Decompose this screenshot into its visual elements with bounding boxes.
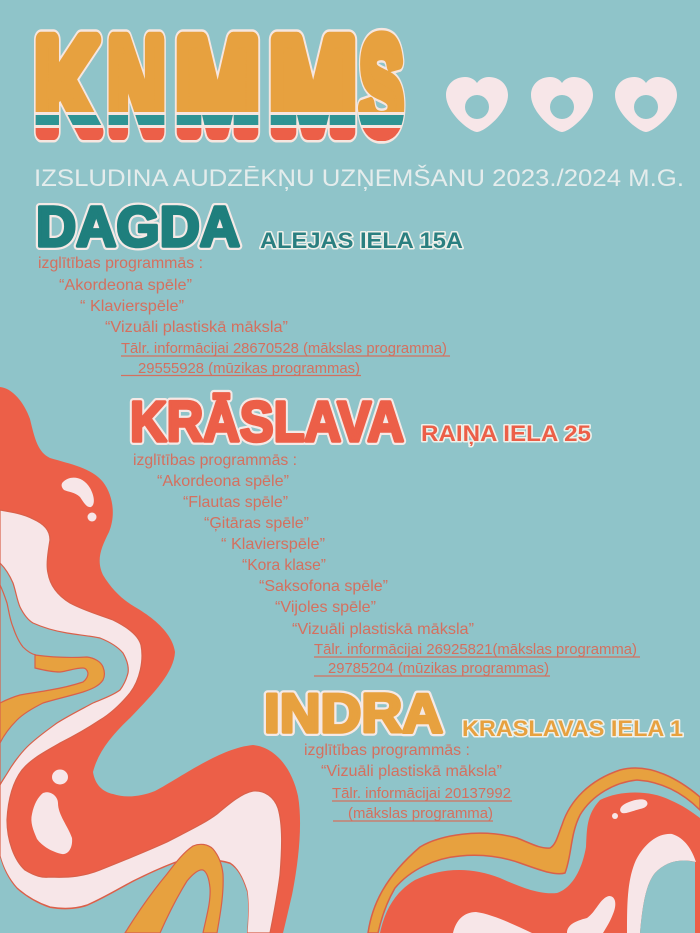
program list: Krāslava: “ Klavierspēle” <box>221 536 325 553</box>
logo: KNMMS: M <box>176 12 259 161</box>
logo: KNMMS: K <box>35 12 99 161</box>
program list: Krāslava: “Kora klase” <box>242 557 326 574</box>
heading: Krāslava: KRĀSLAVA <box>130 390 404 454</box>
program list: Krāslava: “Vizuāli plastiskā māksla” <box>292 621 474 638</box>
poster: S <box>360 12 403 161</box>
program list: Dagda: izglītības programmās : <box>38 255 203 272</box>
address: Indra: KRASLAVAS IELA 1 <box>462 716 683 741</box>
highlight: upper dot <box>88 512 96 522</box>
program list: Krāslava: “Saksofona spēle” <box>259 578 388 595</box>
highlight: bottom-right dot <box>612 813 618 819</box>
logo: KNMMS: M <box>176 12 259 161</box>
program list: Krāslava <box>133 452 474 638</box>
logo: KNMMS: M <box>176 12 259 161</box>
logo: KNMMS: N <box>108 12 165 161</box>
program list: Dagda <box>38 255 288 336</box>
contacts: Krāslava: 29785204 (mūzikas programmas) <box>328 660 549 677</box>
program list: Krāslava: “Akordeona spēle” <box>157 473 289 490</box>
bottom-right retro wave decoration <box>368 768 700 933</box>
program list: Indra: “Vizuāli plastiskā māksla” <box>321 763 502 780</box>
contacts: Dagda: Tālr. informācijai 28670528 (mākslas programma) <box>121 340 447 357</box>
program list: Krāslava: “Flautas spēle” <box>183 494 288 511</box>
contacts: Krāslava: Tālr. informācijai 26925821(mākslas programma) <box>314 641 637 658</box>
highlight: bottom-right blob 1 <box>453 912 532 933</box>
section: Krāslava <box>130 390 640 677</box>
contacts: Dagda: 29555928 (mūzikas programmas) <box>138 360 360 377</box>
left retro wave decoration <box>0 387 300 933</box>
section: Dagda <box>36 195 463 377</box>
contacts: Krāslava <box>314 641 640 677</box>
program list: Krāslava: izglītības programmās : <box>133 452 297 469</box>
logo: KNMMS: M <box>270 12 356 161</box>
heading: Dagda: DAGDA <box>36 195 240 259</box>
contacts: Indra: (mākslas programma) <box>348 805 493 822</box>
heading: Dagda: DAGDA <box>36 195 240 259</box>
program list: Dagda: “Vizuāli plastiskā māksla” <box>105 319 288 336</box>
logo: KNMMS: M <box>176 12 259 161</box>
orange arch bottom <box>125 844 223 933</box>
logo: KNMMS: K <box>35 12 99 161</box>
highlight: bottom-right blob 2 <box>567 896 615 933</box>
icon: heart 1 <box>446 77 508 132</box>
logo: KNMMS: K <box>35 12 99 161</box>
orange ribbon left <box>0 655 104 743</box>
highlight: upper blob <box>62 478 94 507</box>
section: Indra <box>264 682 683 822</box>
heading: Indra: INDRA <box>264 682 443 744</box>
program list: Krāslava: “Ģitāras spēle” <box>204 515 309 532</box>
logo: KNMMS: N <box>108 12 165 161</box>
poster: S <box>360 12 403 161</box>
logo: KNMMS: K <box>35 12 99 161</box>
program list: Krāslava: “Vijoles spēle” <box>275 599 376 616</box>
program list: Dagda: “Akordeona spēle” <box>59 277 192 294</box>
icons: three hearts <box>446 77 677 132</box>
contacts: Indra <box>332 785 512 822</box>
contacts: Indra: Tālr. informācijai 20137992 <box>332 785 511 802</box>
contacts: Dagda <box>121 340 450 377</box>
logo: KNMMS <box>34 28 406 144</box>
logo: KNMMS: N <box>108 12 165 161</box>
heading: Krāslava: KRĀSLAVA <box>130 390 404 454</box>
icon: heart 3 <box>615 77 677 132</box>
address: Krāslava: RAIŅA IELA 25 <box>421 421 591 446</box>
poster: S <box>360 12 403 161</box>
program list: Indra <box>304 742 502 780</box>
highlight: lower blob <box>31 792 72 854</box>
logo: KNMMS: M <box>270 12 356 161</box>
logo: KNMMS: M <box>270 12 356 161</box>
program list: Indra: izglītības programmās : <box>304 742 470 759</box>
heading: Indra: INDRA <box>264 682 443 744</box>
logo: KNMMS: M <box>270 12 356 161</box>
address: Dagda: ALEJAS IELA 15A <box>260 228 463 253</box>
poster: S <box>360 12 403 161</box>
logo: KNMMS: N <box>108 12 165 161</box>
program list: Dagda: “ Klavierspēle” <box>80 298 184 315</box>
highlight: lower dot <box>52 770 68 784</box>
subtitle: IZSLUDINA AUDZĒKŅU UZŅEMŠANU 2023./2024 M.G. <box>34 164 684 192</box>
highlight: bottom-right dash <box>620 799 647 813</box>
icon: heart 2 <box>531 77 593 132</box>
